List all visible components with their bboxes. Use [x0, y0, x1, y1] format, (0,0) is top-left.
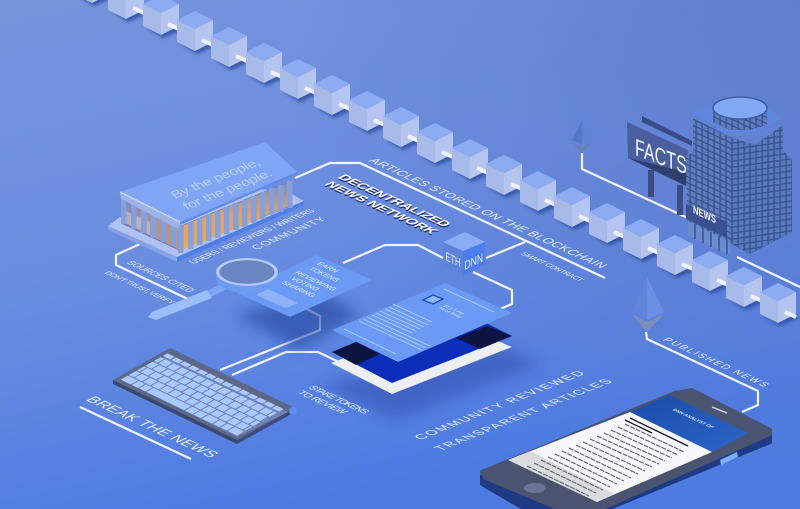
community label: USERS / REVIEWERS / WRITERS	[187, 208, 318, 265]
building: news: NEWS	[693, 204, 716, 226]
earn tokens card: VOTING	[288, 276, 323, 292]
article date: 27.1.7 PM	[442, 304, 465, 315]
sources cited label: DON'T TRUST, VERIFY	[102, 270, 178, 305]
article card	[332, 283, 512, 362]
keyboard keys	[124, 355, 281, 433]
phone side button	[720, 452, 738, 465]
break the news heading: BREAK THE NEWS	[81, 395, 222, 460]
phone header text: DNN ANALYST OF	[670, 408, 715, 429]
billboard: facts: FACTS	[635, 134, 687, 180]
phone home button	[524, 483, 546, 493]
earn tokens card shadow	[235, 290, 360, 350]
earn tokens card: REVIEWING	[292, 270, 339, 292]
ethereum icon: bottom	[632, 277, 664, 332]
lobby	[688, 221, 730, 255]
news sign	[686, 204, 727, 238]
temple: community	[108, 142, 304, 262]
phone speaker	[712, 407, 727, 413]
community label: COMMUNITY	[249, 216, 330, 251]
article date: 44:14 Today	[437, 306, 465, 319]
news stack shadow	[320, 345, 540, 420]
sources cited label	[102, 260, 197, 305]
heading: decentralized news network: NEWS NETWORK	[321, 181, 441, 237]
earn tokens card: EARN	[314, 261, 341, 274]
heading: decentralized news network: DECENTRALIZED	[334, 173, 454, 228]
earn tokens card	[237, 255, 372, 317]
heading: articles stored on the blockchain: ARTICLES STORED ON THE BLOCKCHAIN	[365, 156, 611, 270]
ethereum icon: top	[572, 120, 592, 153]
smart contract label: SMART CONTRACT	[518, 251, 587, 283]
ETH DNN cube: DNN	[464, 250, 483, 273]
published news label: PUBLISHED NEWS	[659, 337, 771, 388]
billboard: facts	[627, 116, 692, 215]
earn tokens card: SHARING	[279, 280, 319, 298]
phone	[482, 390, 770, 509]
earn tokens card: TOKENS	[306, 266, 342, 283]
stake tokens label: TO REVIEW	[294, 390, 350, 415]
phone screen article	[508, 412, 712, 502]
building: news	[686, 97, 792, 255]
connector lines	[116, 153, 800, 412]
roof slogan: for the people.	[180, 167, 275, 212]
community reviewed label: COMMUNITY REVIEWED	[411, 370, 588, 441]
keyboard	[113, 348, 297, 444]
heading: decentralized news network: NEWS NETWORK	[321, 180, 441, 235]
phone screen header	[630, 395, 748, 452]
ETH DNN cube	[443, 232, 485, 276]
magnifying glass	[148, 258, 278, 320]
blockchain of cubes	[74, 0, 798, 326]
roof slogan: By the people,	[168, 156, 263, 201]
stake tokens label: STAKE TOKENS	[305, 385, 372, 415]
article logo	[423, 295, 443, 304]
ETH DNN cube: ETH	[446, 249, 460, 270]
community reviewed label: TRANSPARENT ARTICLES	[431, 378, 616, 452]
heading: decentralized news network: DECENTRALIZED	[334, 174, 454, 230]
heading: decentralized news network	[321, 173, 454, 237]
stacked article layers	[331, 305, 512, 394]
sources cited label: SOURCES CITED	[123, 260, 197, 294]
